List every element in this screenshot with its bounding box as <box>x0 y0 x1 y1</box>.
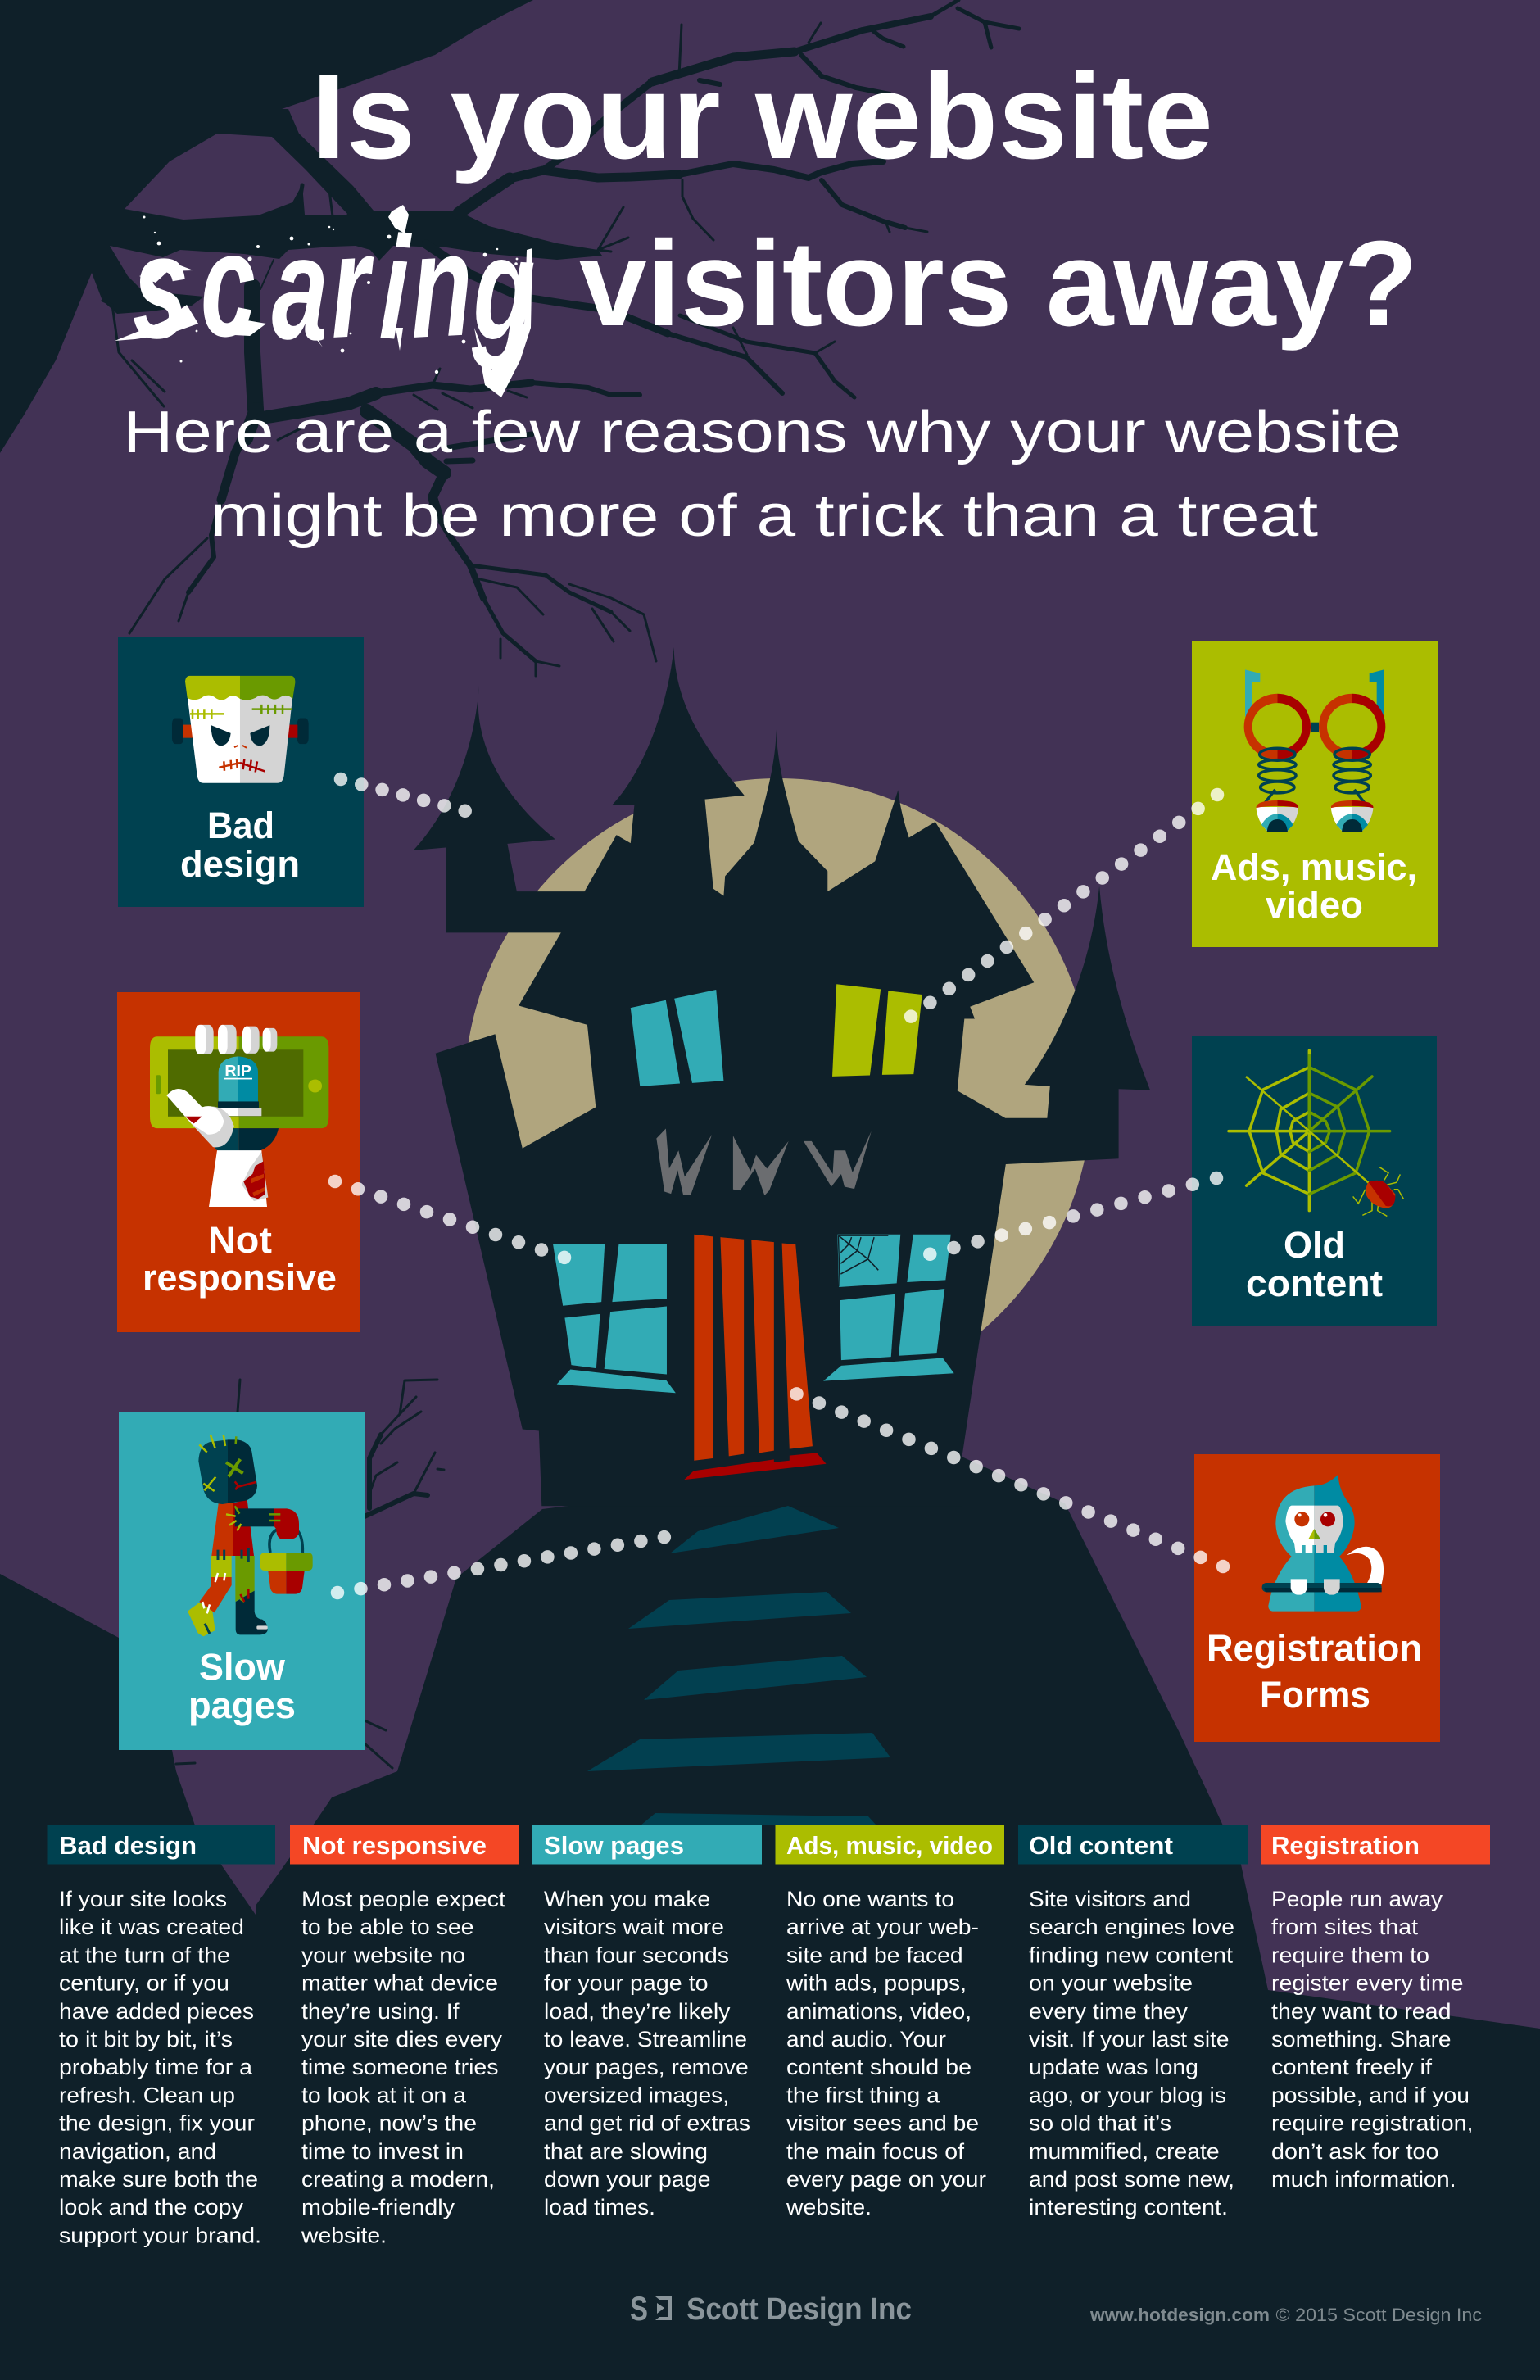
body text: have added pieces <box>59 1999 254 2024</box>
body text: search engines love <box>1029 1915 1234 1939</box>
body text: Site visitors and <box>1029 1887 1191 1911</box>
path steps <box>587 1506 890 1825</box>
body text: refresh. Clean up <box>59 2083 235 2107</box>
body text: than four seconds <box>544 1943 729 1967</box>
label <box>1207 1627 1422 1716</box>
label <box>1211 846 1417 926</box>
label: pages <box>188 1684 296 1726</box>
body text: visitor sees and be <box>786 2111 979 2136</box>
body text: mobile-friendly <box>301 2195 455 2219</box>
column: not responsive: Not responsive <box>302 1831 487 1860</box>
label <box>1246 1224 1383 1304</box>
body text: they want to read <box>1271 1999 1452 2024</box>
body text: that are slowing <box>544 2139 708 2164</box>
panel: bad design <box>118 637 364 907</box>
body text: navigation, and <box>59 2139 216 2164</box>
title line two: visitors away? <box>579 216 1418 351</box>
body text: to leave. Streamline <box>544 2027 747 2051</box>
label: responsive <box>143 1257 337 1299</box>
label: Old <box>1284 1224 1345 1266</box>
label <box>180 805 300 885</box>
body text: register every time <box>1271 1971 1463 1996</box>
body text: animations, video, <box>786 1999 972 2024</box>
body text: ago, or your blog is <box>1029 2083 1226 2107</box>
body text <box>59 1887 261 2247</box>
body text: interesting content. <box>1029 2195 1228 2219</box>
icon: zombie hand with phone: RIP <box>224 1063 251 1080</box>
right eyeball <box>1331 800 1374 832</box>
label <box>143 1219 337 1299</box>
column: not responsive <box>290 1825 519 2247</box>
left eyeball <box>1256 800 1298 832</box>
house silhouette <box>414 647 1150 1506</box>
copyright <box>1089 2305 1482 2325</box>
column: registration <box>1261 1825 1490 2192</box>
icon: frankenstein <box>172 676 309 783</box>
column: bad design <box>48 1825 275 2247</box>
body text: site and be faced <box>786 1943 963 1967</box>
cobweb <box>838 1235 888 1286</box>
column: ads music video <box>775 1825 1004 2219</box>
body text: down your page <box>544 2167 711 2192</box>
body text <box>301 1887 506 2247</box>
body text: People run away <box>1271 1887 1443 1911</box>
body text: every time they <box>1029 1999 1189 2024</box>
body text: the design, fix your <box>59 2111 255 2136</box>
body text: visit. If your last site <box>1029 2027 1229 2051</box>
body text: your website no <box>301 1943 465 1967</box>
label: content <box>1246 1263 1383 1304</box>
haunted house <box>414 647 1150 1506</box>
label: design <box>180 843 300 885</box>
body text: require them to <box>1271 1943 1429 1967</box>
body text: century, or if you <box>59 1971 229 1996</box>
body text: make sure both the <box>59 2167 258 2192</box>
label: Ads, music, <box>1211 846 1417 888</box>
title <box>115 49 1418 397</box>
body text: don’t ask for too <box>1271 2139 1438 2164</box>
subtitle: Here are a few reasons why your website <box>123 400 1402 465</box>
icon: zombie hand with phone <box>150 1025 328 1207</box>
body text: much information. <box>1271 2167 1456 2192</box>
dotted connectors <box>335 779 1223 1593</box>
body text: time someone tries <box>301 2055 498 2079</box>
icon: grim reaper <box>1262 1475 1384 1612</box>
body text: update was long <box>1029 2055 1198 2079</box>
footer logo: S <box>630 2289 648 2328</box>
body text: Most people expect <box>301 1887 506 1911</box>
lower left window <box>553 1244 676 1393</box>
body text: arrive at your web- <box>786 1915 979 1939</box>
body text: and audio. Your <box>786 2027 946 2051</box>
footer logo: Scott Design Inc <box>686 2292 912 2327</box>
lower right window <box>823 1235 954 1381</box>
moon <box>464 778 1092 1406</box>
body text: so old that it’s <box>1029 2111 1171 2136</box>
subtitle <box>123 400 1402 549</box>
body text: require registration, <box>1271 2111 1473 2136</box>
column: slow pages: Slow pages <box>544 1831 684 1860</box>
body text: time to invest in <box>301 2139 464 2164</box>
body text: load times. <box>544 2195 655 2219</box>
label: video <box>1266 884 1363 926</box>
body text: to look at it on a <box>301 2083 467 2107</box>
body text <box>786 1887 986 2219</box>
upper left window <box>631 990 723 1086</box>
body text: your pages, remove <box>544 2055 749 2079</box>
body text: visitors wait more <box>544 1915 724 1939</box>
door step <box>684 1453 827 1480</box>
body text: and post some new, <box>1029 2167 1234 2192</box>
hill <box>0 1457 1540 2380</box>
body text <box>1271 1887 1473 2192</box>
label: Slow <box>199 1646 286 1688</box>
body text: look and the copy <box>59 2195 244 2219</box>
body text: load, they’re likely <box>544 1999 731 2024</box>
panel: slow pages <box>119 1412 365 1750</box>
body text: the main focus of <box>786 2139 965 2164</box>
body text: matter what device <box>301 1971 498 1996</box>
body text: finding new content <box>1029 1943 1234 1967</box>
body text: from sites that <box>1271 1915 1419 1939</box>
panel: not responsive <box>117 992 360 1332</box>
body text: and get rid of extras <box>544 2111 750 2136</box>
body text: mummified, create <box>1029 2139 1220 2164</box>
column: old content: Old content <box>1029 1831 1173 1860</box>
column: registration: Registration <box>1271 1831 1420 1860</box>
body text: with ads, popups, <box>786 1971 967 1996</box>
small tree <box>176 1380 444 1768</box>
body text <box>544 1887 750 2219</box>
footer logo <box>630 2289 912 2328</box>
panel: registration forms <box>1194 1454 1440 1742</box>
copyright: www.hotdesign.com <box>1089 2305 1270 2325</box>
body text: content should be <box>786 2055 972 2079</box>
body text <box>1029 1887 1234 2219</box>
body text: to it bit by bit, it’s <box>59 2027 233 2051</box>
label: Bad <box>207 805 274 846</box>
body text: phone, now’s the <box>301 2111 477 2136</box>
body text: If your site looks <box>59 1887 227 1911</box>
label <box>188 1646 296 1726</box>
column: bad design: Bad design <box>59 1831 197 1860</box>
door <box>694 1235 813 1461</box>
label: Forms <box>1260 1674 1370 1716</box>
body text: your site dies every <box>301 2027 503 2051</box>
column: slow pages <box>532 1825 762 2219</box>
icon: spring-eye glasses <box>1244 669 1385 832</box>
www teeth <box>656 1128 872 1195</box>
body text: content freely if <box>1271 2055 1433 2079</box>
body text: at the turn of the <box>59 1943 230 1967</box>
body text: for your page to <box>544 1971 708 1996</box>
label: Registration <box>1207 1627 1422 1669</box>
body text: every page on your <box>786 2167 986 2192</box>
body text: When you make <box>544 1887 710 1911</box>
tree silhouette <box>0 0 1019 676</box>
subtitle: might be more of a trick than a treat <box>211 483 1318 549</box>
panel: ads music video <box>1192 641 1438 947</box>
column: ads music video: Ads, music, video <box>786 1831 993 1860</box>
column: old content <box>1018 1825 1248 2219</box>
upper right window <box>832 984 922 1077</box>
body text: on your website <box>1029 1971 1193 1996</box>
icon: patchwork zombie <box>188 1435 313 1636</box>
body text: website. <box>786 2195 872 2219</box>
copyright: © 2015 Scott Design Inc <box>1276 2305 1482 2325</box>
body text: they’re using. If <box>301 1999 460 2024</box>
body text: to be able to see <box>301 1915 473 1939</box>
body text: support your brand. <box>59 2223 261 2247</box>
scaring brush word: scaring <box>133 200 537 372</box>
body text: probably time for a <box>59 2055 253 2079</box>
panel: old content <box>1192 1036 1437 1326</box>
body text: oversized images, <box>544 2083 729 2107</box>
body text: creating a modern, <box>301 2167 495 2192</box>
body text: like it was created <box>59 1915 244 1939</box>
body text: the first thing a <box>786 2083 940 2107</box>
body text: something. Share <box>1271 2027 1452 2051</box>
body text: website. <box>301 2223 387 2247</box>
icon: spiderweb <box>1229 1050 1403 1217</box>
label: Not <box>208 1219 272 1261</box>
title line one: Is your website <box>311 49 1213 184</box>
body text: possible, and if you <box>1271 2083 1470 2107</box>
body text: No one wants to <box>786 1887 954 1911</box>
